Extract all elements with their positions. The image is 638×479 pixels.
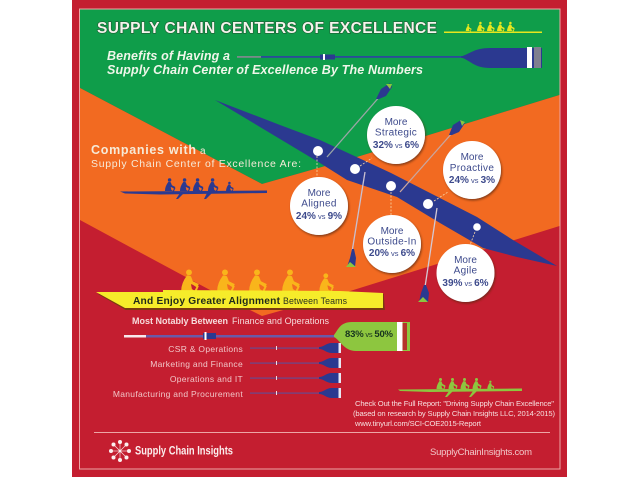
oar: up from third seat bbox=[400, 120, 465, 192]
report text: (based on research by Supply Chain Insights LLC, 2014-2015) bbox=[353, 409, 555, 418]
row: manufacturing and procurement bbox=[113, 388, 341, 399]
dotted connectors bbox=[317, 156, 475, 245]
bubble: more proactive bbox=[443, 141, 501, 199]
bubble: more outside-in: 20% vs 6% bbox=[369, 248, 415, 259]
bubble: more agile: Agile bbox=[454, 266, 477, 276]
icon: blue rowing boat bbox=[120, 178, 267, 199]
companies heading: a bbox=[200, 146, 206, 157]
title: SUPPLY CHAIN CENTERS OF EXCELLENCE bbox=[97, 20, 437, 37]
companies heading: Supply Chain Center of Excellence Are: bbox=[91, 158, 301, 170]
bubble: more agile bbox=[436, 244, 494, 302]
icon: logo burst bbox=[109, 440, 131, 462]
companies heading: Companies with bbox=[91, 143, 196, 157]
bubble: more aligned bbox=[290, 177, 348, 235]
bubble: more strategic bbox=[367, 106, 425, 164]
row: manufacturing and procurement: Manufacturing and Procurement bbox=[113, 389, 243, 399]
banner: greater alignment: And Enjoy Greater Alignment bbox=[133, 296, 281, 307]
heading: most notably between: Finance and Operations bbox=[232, 316, 330, 326]
green area bbox=[80, 10, 560, 184]
bubble: more agile: 39% vs 6% bbox=[442, 278, 489, 289]
bubble: more outside-in: Outside-In bbox=[367, 236, 417, 248]
large oar bbox=[124, 322, 410, 351]
logo bbox=[109, 440, 233, 462]
subtitle: Benefits of Having a bbox=[107, 49, 230, 63]
seat dots bbox=[313, 146, 481, 231]
bubble: more strategic: 32% vs 6% bbox=[373, 140, 419, 151]
icon: yellow rowing boat bbox=[444, 22, 542, 33]
heading: most notably between: Most Notably Between bbox=[132, 316, 228, 326]
oar: up from first seat bbox=[327, 83, 392, 157]
bubble: more aligned: Aligned bbox=[301, 198, 337, 210]
boat hull bbox=[215, 100, 557, 266]
row: marketing and finance: Marketing and Finance bbox=[150, 359, 243, 369]
bubble: more aligned: More bbox=[308, 188, 331, 199]
row: csr and operations: CSR & Operations bbox=[168, 344, 243, 354]
logo: Supply Chain Insights bbox=[135, 446, 233, 458]
banner: greater alignment: Between Teams bbox=[283, 296, 348, 306]
row: marketing and finance bbox=[150, 358, 341, 369]
oars on hull bbox=[327, 83, 465, 302]
oar: down from fourth seat bbox=[418, 208, 437, 302]
banner: greater alignment bbox=[96, 290, 385, 310]
heading: most notably between bbox=[132, 316, 330, 326]
background panel bbox=[72, 0, 567, 477]
row: operations and it bbox=[170, 373, 341, 384]
companies heading bbox=[91, 143, 301, 170]
row: csr and operations bbox=[168, 343, 341, 354]
bubble: more strategic: More bbox=[385, 117, 408, 128]
bubble: more agile: More bbox=[454, 255, 477, 266]
oar: down from second seat bbox=[346, 172, 365, 267]
bubble: more outside-in: More bbox=[381, 226, 404, 237]
bubble: more strategic: Strategic bbox=[375, 128, 417, 138]
orange area bbox=[80, 88, 560, 316]
bubble: more proactive: 24% vs 3% bbox=[449, 175, 495, 186]
bubble: more proactive: More bbox=[461, 152, 484, 163]
bubble: more outside-in bbox=[363, 215, 421, 273]
large oar: 83% vs 50% bbox=[345, 329, 394, 340]
icon: top oar bbox=[237, 47, 542, 68]
report text bbox=[353, 399, 555, 428]
subtitle: Supply Chain Center of Excellence By The Numbers bbox=[107, 63, 423, 77]
icon: green rowing boat bbox=[398, 378, 522, 397]
row: operations and it: Operations and IT bbox=[170, 374, 243, 384]
icon: yellow rowers bbox=[181, 269, 334, 293]
bubble: more proactive: Proactive bbox=[450, 163, 494, 174]
website: SupplyChainInsights.com bbox=[430, 447, 532, 458]
report text: Check Out the Full Report: "Driving Supply Chain Excellence" bbox=[355, 399, 554, 408]
bubble: more aligned: 24% vs 9% bbox=[296, 211, 342, 222]
report text: www.tinyurl.com/SCI-COE2015-Report bbox=[354, 419, 482, 428]
